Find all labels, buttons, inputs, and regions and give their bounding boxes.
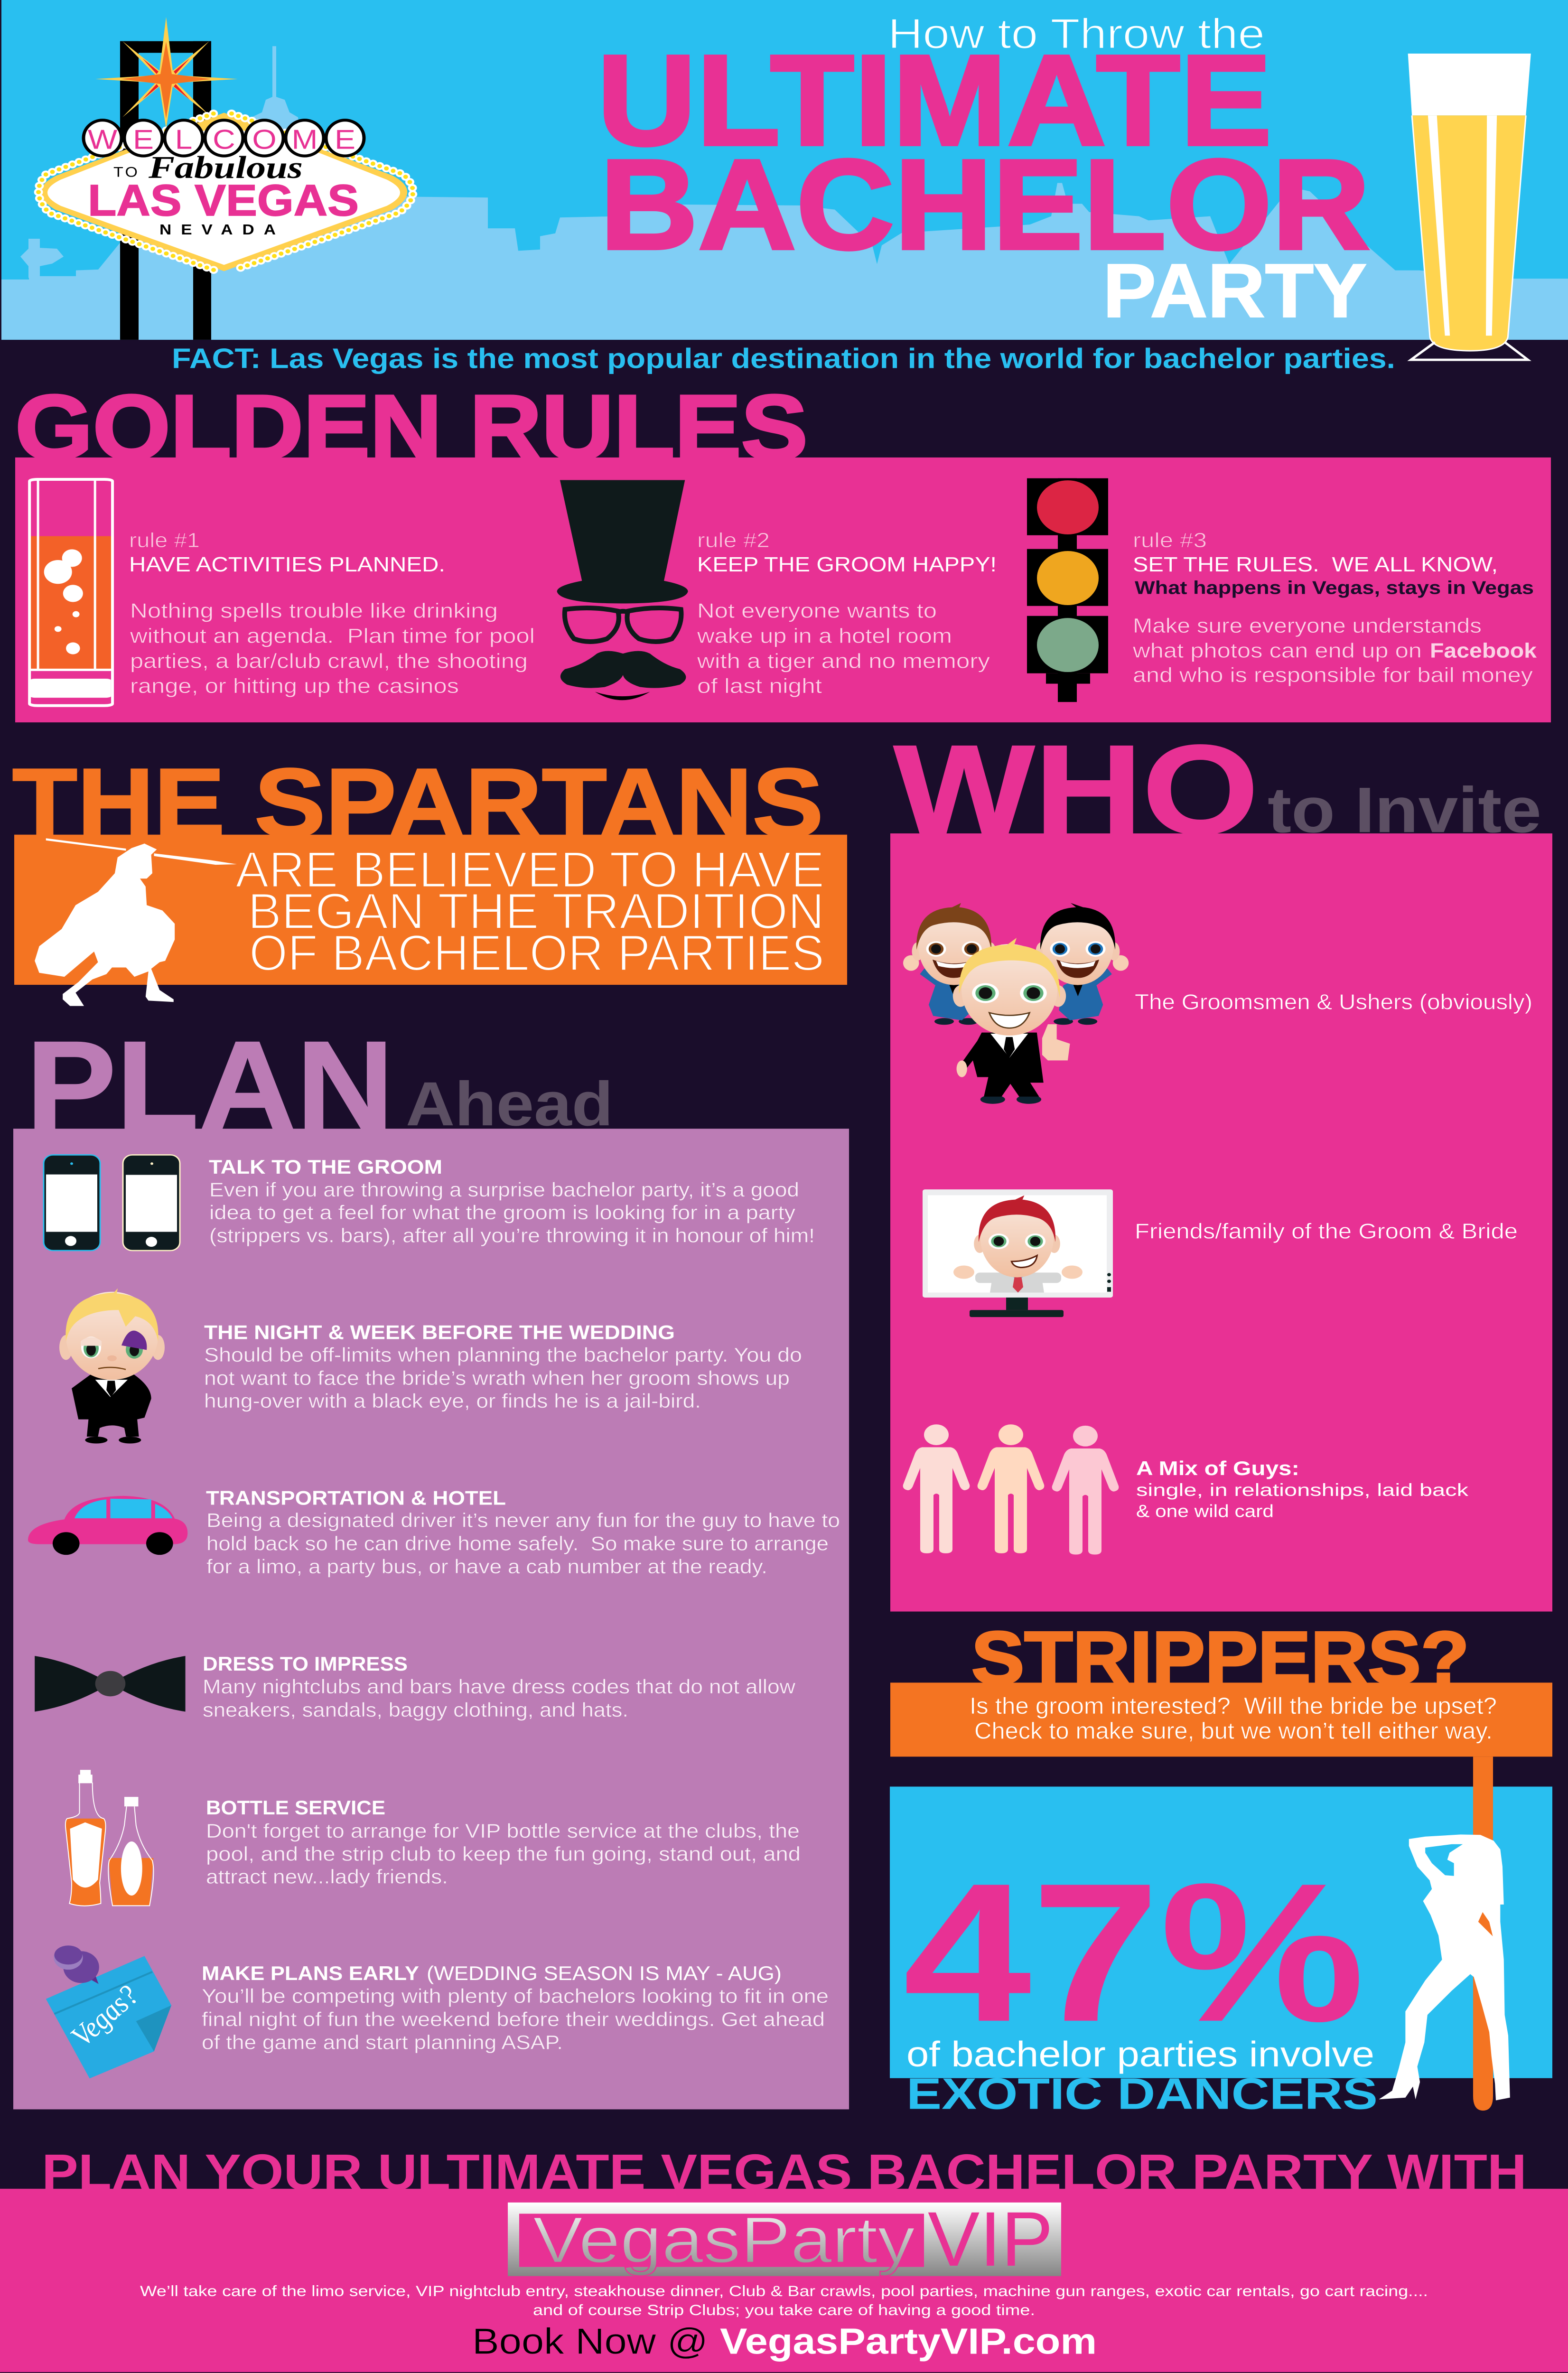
icon: star	[95, 17, 238, 129]
logo: VegasPartyVIP: VegasParty	[533, 2204, 915, 2277]
heading: plan ahead	[26, 1015, 613, 1157]
text: transportation and hotel: TRANSPORTATION & HOTEL	[206, 1486, 506, 1509]
welcome bulbs	[84, 120, 364, 156]
rule 3 text: rule #3	[1133, 528, 1207, 551]
heading: strippers: STRIPPERS?	[971, 1616, 1469, 1700]
text: bottle service: attract new...lady friends.	[206, 1865, 448, 1888]
text: talk to the groom	[209, 1156, 815, 1247]
icon: spartan silhouette	[35, 838, 237, 1006]
heading: plan ahead: Ahead	[406, 1069, 613, 1139]
text: bottle service: Don't forget to arrange for VIP bottle service at the clubs, the	[206, 1820, 800, 1842]
icon: pinned note	[46, 1945, 171, 2078]
label: friends and family: Friends/family of the Groom & Bride	[1135, 1219, 1518, 1243]
panel: strippers question: Check to make sure, but we won’t tell either way.	[974, 1718, 1493, 1744]
text: transportation and hotel: for a limo, a party bus, or have a cab number at the ready.	[206, 1555, 767, 1578]
text: talk to the groom: idea to get a feel for what the groom is looking for in a party	[209, 1201, 795, 1224]
welcome bulbs: M	[292, 124, 317, 155]
icon: traffic light	[1027, 478, 1108, 702]
rule 2 text: Not everyone wants to	[697, 598, 937, 622]
text: night and week before	[204, 1321, 802, 1412]
rule 2 text: rule #2	[697, 528, 770, 551]
label: mix of guys: & one wild card	[1136, 1502, 1274, 1521]
text: dress to impress: sneakers, sandals, baggy clothing, and hats.	[203, 1699, 628, 1721]
text: bottle service	[206, 1796, 801, 1888]
text: bottle service: BOTTLE SERVICE	[206, 1796, 385, 1819]
text: transportation and hotel: hold back so he can drive home safely. So make sure to arrange	[206, 1532, 829, 1555]
text: talk to the groom: (strippers vs. bars), after all you’re throwing it in honour of him!	[209, 1224, 815, 1247]
services text: We’ll take care of the limo service, VIP nightclub entry, steakhouse dinner, Club & Bar crawls, pool parties, machine gun ranges, exotic car rentals, go cart racing....	[140, 2283, 1428, 2299]
rule 3 text: What happens in Vegas, stays in Vegas	[1135, 578, 1534, 598]
text: make plans early: (WEDDING SEASON IS MAY - AUG)	[427, 1962, 782, 1984]
icon: three figures	[903, 1424, 1119, 1554]
black haired groomsman	[1036, 903, 1129, 1025]
Las Vegas sign body	[38, 112, 413, 271]
sign text: Las Vegas: LAS VEGAS	[88, 176, 359, 225]
brown haired groomsman	[903, 903, 996, 1025]
stat label: of bachelor parties involve	[906, 2035, 1374, 2074]
rule 3 text: Make sure everyone understands	[1133, 614, 1482, 637]
book now line	[472, 2321, 1097, 2362]
text: night and week before: THE NIGHT & WEEK BEFORE THE WEDDING	[204, 1321, 675, 1344]
rule 1 text	[129, 528, 535, 697]
text: night and week before: not want to face the bride’s wrath when her groom shows up	[204, 1367, 790, 1389]
rule 3 text: Facebook	[1430, 638, 1537, 662]
sign text: Nevada: NEVADA	[159, 221, 276, 238]
stat: 47%: 47%	[903, 1842, 1365, 2063]
text: night and week before: hung-over with a black eye, or finds he is a jail-bird.	[204, 1390, 701, 1412]
sign text: to fabulous: Fabulous	[148, 150, 303, 185]
sign poles	[120, 41, 211, 340]
text: dress to impress: Many nightclubs and bars have dress codes that do not allow	[203, 1675, 795, 1698]
rule 1 text: HAVE ACTIVITIES PLANNED.	[129, 552, 445, 576]
heading: who to invite: to Invite	[1268, 774, 1541, 846]
text: make plans early: final night of fun the weekend before their weddings. Get ahead	[202, 2008, 825, 2031]
icon: pinned note: Vegas?	[64, 1980, 146, 2052]
heading: who to invite: WHO	[894, 719, 1259, 860]
panel: 47 percent	[890, 1756, 1552, 2119]
services text: and of course Strip Clubs; you take care of having a good time.	[533, 2302, 1035, 2319]
welcome bulbs: L	[175, 124, 192, 155]
panel: golden rules	[15, 458, 1551, 722]
icon: groomsmen	[903, 903, 1129, 1104]
title: how to throw: How to Throw the	[888, 10, 1265, 57]
fact line: FACT: Las Vegas is the most popular destination in the world for bachelor parties.	[172, 342, 1395, 374]
text: bottle service: pool, and the strip club to keep the fun going, stand out, and	[206, 1842, 801, 1865]
label: mix of guys: A Mix of Guys:	[1136, 1457, 1299, 1479]
icon: phones	[44, 1155, 180, 1251]
icon: dancer silhouette	[1379, 1834, 1510, 2101]
text: make plans early: MAKE PLANS EARLY	[202, 1962, 419, 1984]
icon: beer glass	[1408, 54, 1531, 360]
heading: who to invite	[894, 719, 1541, 860]
panel: who to invite	[890, 833, 1552, 1612]
logo: VegasPartyVIP: VIP	[928, 2196, 1053, 2282]
sign text: to fabulous: TO	[113, 164, 138, 180]
welcome bulbs: O	[252, 124, 277, 155]
icon: cocktail glass	[29, 479, 112, 706]
title: party: PARTY	[1103, 248, 1367, 333]
welcome bulbs: W	[88, 124, 118, 155]
text: night and week before: Should be off-limits when planning the bachelor party. You do	[204, 1344, 802, 1366]
panel: plan ahead	[13, 1129, 849, 2109]
services text	[140, 2283, 1428, 2319]
panel: header	[1, 0, 1568, 340]
text: make plans early	[202, 1962, 829, 2054]
label: mix of guys: single, in relationships, laid back	[1136, 1480, 1468, 1500]
text: talk to the groom: Even if you are throwing a surprise bachelor party, it’s a good	[209, 1178, 799, 1201]
text: make plans early: of the game and start planning ASAP.	[202, 2031, 563, 2054]
rule 3 text: and who is responsible for bail money	[1133, 663, 1533, 686]
icon: bow tie	[35, 1656, 186, 1711]
skyline	[1, 46, 1568, 340]
rule 1 text: rule #1	[129, 528, 200, 551]
rule 3 text: what photos can end up on	[1132, 638, 1422, 662]
rule 2 text: KEEP THE GROOM HAPPY!	[697, 552, 997, 576]
text: transportation and hotel: Being a designated driver it’s never any fun for the guy to have to	[206, 1509, 840, 1532]
rule 1 text: without an agenda. Plan time for pool	[130, 624, 535, 647]
rule 3 text	[1132, 528, 1537, 686]
heading: the spartans: THE SPARTANS	[12, 748, 823, 857]
icon: car	[28, 1496, 187, 1555]
icon: bottles	[65, 1770, 153, 1906]
panel: strippers question	[890, 1682, 1552, 1756]
title: bachelor: BACHELOR	[600, 133, 1370, 276]
heading: plan ahead: PLAN	[26, 1015, 394, 1157]
text: make plans early: You’ll be competing with plenty of bachelors looking to fit in one	[202, 1985, 829, 2007]
welcome bulbs: E	[335, 124, 355, 155]
book now line: VegasPartyVIP.com	[720, 2321, 1097, 2362]
text: dress to impress	[203, 1653, 795, 1721]
panel: the spartans	[14, 835, 847, 1006]
text: talk to the groom: TALK TO THE GROOM	[209, 1156, 442, 1178]
label: mix of guys	[1136, 1457, 1468, 1521]
spartans text: ARE BELIEVED TO HAVE	[235, 841, 824, 898]
title: ultimate: ULTIMATE	[597, 28, 1272, 172]
rule 3 text: SET THE RULES. WE ALL KNOW,	[1133, 552, 1498, 576]
rule 2 text	[697, 528, 997, 697]
spartans text: OF BACHELOR PARTIES	[249, 925, 824, 981]
rule 2 text: with a tiger and no memory	[697, 649, 990, 673]
welcome bulbs: E	[133, 124, 154, 155]
rule 2 text: wake up in a hotel room	[697, 624, 952, 647]
panel: call to action	[0, 2189, 1568, 2372]
logo: VegasPartyVIP	[508, 2196, 1061, 2282]
rule 1 text: parties, a bar/club crawl, the shooting	[130, 649, 528, 673]
spartans text: BEGAN THE TRADITION	[248, 883, 824, 940]
icon: monitor with friend	[923, 1189, 1113, 1317]
icon: pole	[1473, 1756, 1493, 2111]
text: transportation and hotel	[206, 1486, 840, 1578]
stat label: exotic dancers: EXOTIC DANCERS	[906, 2070, 1378, 2119]
book now line: Book Now @	[472, 2321, 708, 2362]
text: dress to impress: DRESS TO IMPRESS	[203, 1653, 408, 1675]
rule 1 text: Nothing spells trouble like drinking	[130, 598, 498, 622]
rule 2 text: of last night	[697, 674, 822, 697]
blond groom	[953, 938, 1070, 1104]
panel: strippers question: Is the groom interested? Will the bride be upset?	[970, 1693, 1497, 1719]
icon: groom with black eye	[59, 1289, 165, 1444]
heading: golden rules: GOLDEN RULES	[15, 376, 808, 479]
spartans text	[235, 841, 824, 981]
welcome bulbs: C	[213, 124, 235, 155]
rule 1 text: range, or hitting up the casinos	[130, 674, 459, 697]
icon: top hat, glasses and moustache	[557, 480, 688, 700]
label: groomsmen: The Groomsmen & Ushers (obviously)	[1135, 990, 1532, 1014]
